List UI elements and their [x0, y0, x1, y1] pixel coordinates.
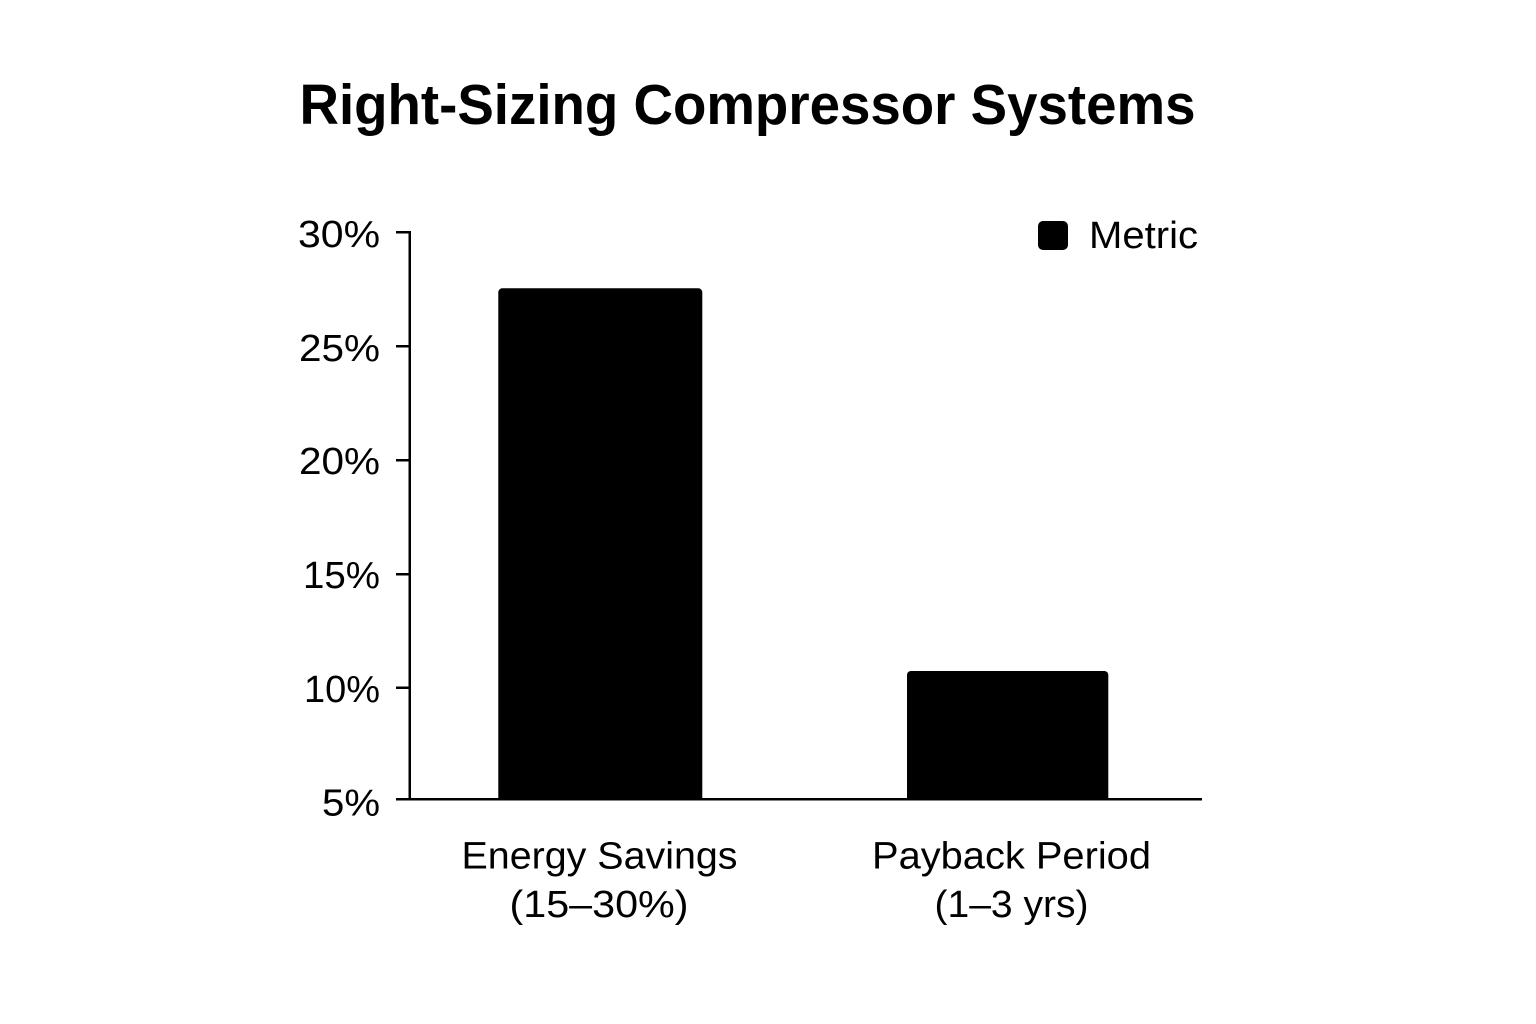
- category label: payback period: Payback Period: [872, 836, 1151, 878]
- legend: Metric: [1089, 215, 1198, 257]
- y axis labels: 25%: [299, 328, 380, 370]
- category label: energy savings: Energy Savings: [462, 836, 738, 878]
- category label: payback period: [872, 836, 1151, 926]
- bar chart: [298, 214, 1202, 926]
- category label: energy savings: [462, 836, 738, 926]
- y axis labels: 30%: [298, 214, 380, 256]
- category label: energy savings: (15–30%): [510, 884, 688, 926]
- legend: [1038, 215, 1198, 257]
- bar: payback period: [907, 671, 1108, 799]
- y axis: [396, 231, 411, 800]
- title: Right-Sizing Compressor Systems: [300, 73, 1196, 137]
- category label: payback period: (1–3 yrs): [934, 884, 1088, 926]
- y axis labels: 10%: [304, 669, 380, 711]
- y axis labels: 20%: [299, 441, 380, 483]
- x axis: [408, 798, 1202, 800]
- y axis labels: 15%: [303, 555, 380, 597]
- y axis labels: [298, 214, 380, 824]
- y axis labels: 5%: [322, 782, 380, 824]
- bar: energy savings: [498, 288, 702, 799]
